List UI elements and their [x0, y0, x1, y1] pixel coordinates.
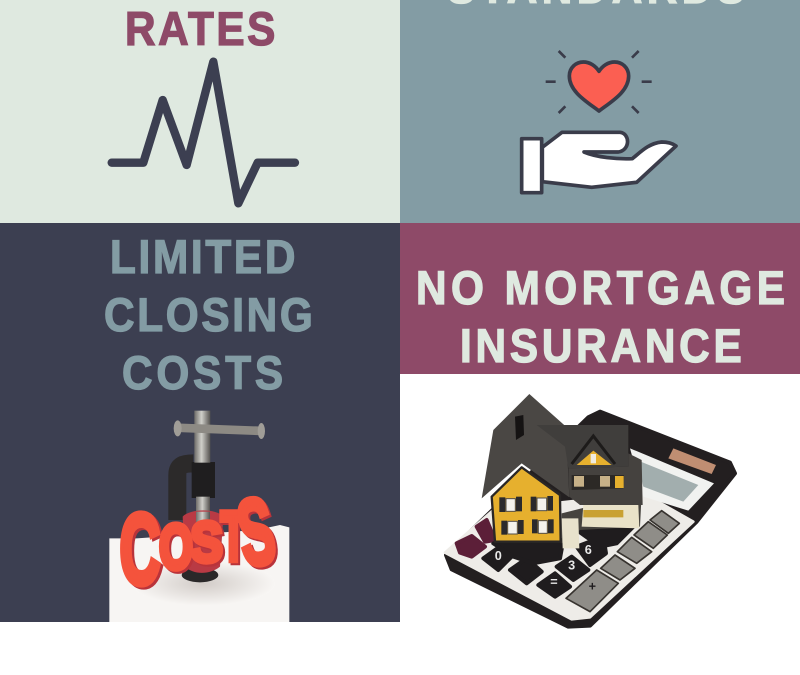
label: costs letters: S: [191, 511, 223, 575]
heading: limited closing costs: LIMITED: [110, 232, 295, 284]
image: house on calculator: 3: [568, 558, 575, 572]
heading: limited closing costs: COSTS: [122, 348, 283, 400]
panel: standards: [400, 0, 800, 223]
label: costs letters, extruded shadow: S: [232, 479, 284, 588]
label: costs letters: S: [230, 477, 282, 586]
image: house on calculator: [445, 394, 735, 627]
label: costs letters, extruded shadow: [122, 479, 284, 607]
label: costs letters, extruded shadow: C: [122, 496, 163, 607]
image: house on calculator: +: [589, 580, 596, 594]
icon: open hand: [522, 132, 676, 193]
heading: rates: RATES: [125, 4, 275, 56]
label: costs letters, extruded shadow: O: [161, 514, 195, 584]
heading: limited closing costs: [104, 232, 313, 400]
panel: limited closing costs: [0, 223, 400, 622]
heading: no mortgage insurance: INSURANCE: [460, 321, 742, 373]
calculator keys: [457, 520, 633, 597]
image: house on calculator: 0: [495, 549, 502, 563]
house: [482, 394, 643, 548]
image: house on calculator: =: [550, 575, 558, 589]
panel: rates: [0, 0, 400, 223]
heading: limited closing costs: CLOSING: [104, 290, 313, 342]
heading: no mortgage insurance: NO MORTGAGE: [416, 263, 785, 315]
image: house on calculator: 6: [585, 543, 592, 557]
label: costs letters: C: [120, 494, 160, 605]
label: costs letters, extruded shadow: S: [193, 513, 225, 577]
image: clamp squeezing costs: [109, 411, 289, 622]
panel: no mortgage insurance: [400, 223, 800, 374]
label: costs letters: T: [221, 498, 246, 576]
heading: no mortgage insurance: [416, 263, 785, 373]
icon: heart with rays: [546, 51, 652, 113]
icon: pulse line: [112, 62, 295, 203]
label: costs letters, extruded shadow: T: [223, 500, 248, 578]
label: costs letters: [120, 477, 282, 605]
label: costs letters: O: [159, 512, 193, 582]
